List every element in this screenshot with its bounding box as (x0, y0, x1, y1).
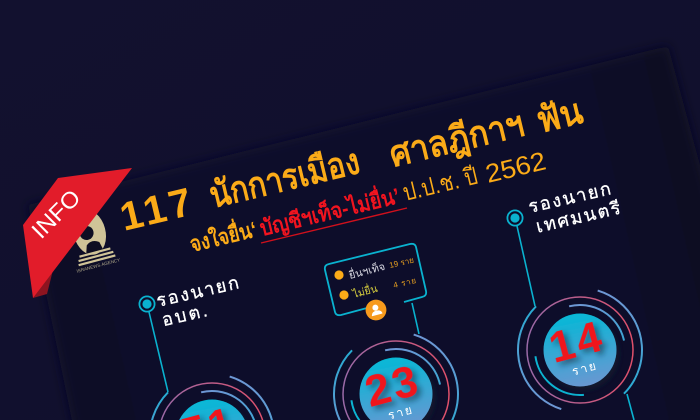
subtitle year: 2562 (482, 145, 549, 189)
title (116, 90, 587, 240)
number 23: 23 (360, 355, 426, 417)
legend value: false filing: 19 ราย (388, 256, 415, 270)
circle: 14 (502, 272, 658, 420)
subtitle (186, 145, 549, 257)
legend text: false filing: ยื่นฯเท็จ (347, 259, 387, 282)
legend text: not filed: ไม่ยื่น (350, 281, 379, 301)
circle: 51 (134, 358, 290, 420)
title: ฟัน (532, 90, 587, 141)
logo: ISRANEWS AGENCY (76, 257, 121, 274)
legend dot: false filing (334, 270, 344, 280)
number 14: 14 (544, 311, 610, 373)
heading line 1: รองนายก (526, 179, 613, 217)
label: left heading (154, 273, 245, 330)
heading line 2: เทศมนตรี (534, 198, 623, 237)
unit 14: ราย (570, 358, 599, 379)
title: 117 (116, 180, 196, 240)
connector below 14 (627, 394, 634, 420)
callout: breakdown of 23 (325, 244, 426, 334)
heading line 1: รองนายก (154, 273, 241, 311)
title: ศาลฎีกาฯ (385, 103, 528, 175)
logo (62, 204, 121, 274)
subtitle lead: จงใจยื่น‘ (186, 213, 259, 257)
label: right heading (526, 177, 623, 237)
marker and line: right (507, 210, 535, 306)
info ribbon (23, 168, 132, 298)
red underline (261, 208, 407, 243)
subtitle highlight: บัญชีฯเท็จ-ไม่ยื่น’ (256, 179, 402, 242)
title: นักการเมือง (205, 140, 364, 216)
subtitle end: ป.ป.ช. ปี (400, 163, 480, 207)
heading line 2: อบต. (160, 300, 209, 330)
legend value: not filed: 4 ราย (392, 276, 417, 290)
ribbon label: INFO (26, 184, 86, 244)
marker and line: left (139, 296, 168, 392)
icon: person (363, 297, 389, 323)
legend dot: not filed (339, 290, 349, 300)
circle: 23 (318, 316, 474, 420)
